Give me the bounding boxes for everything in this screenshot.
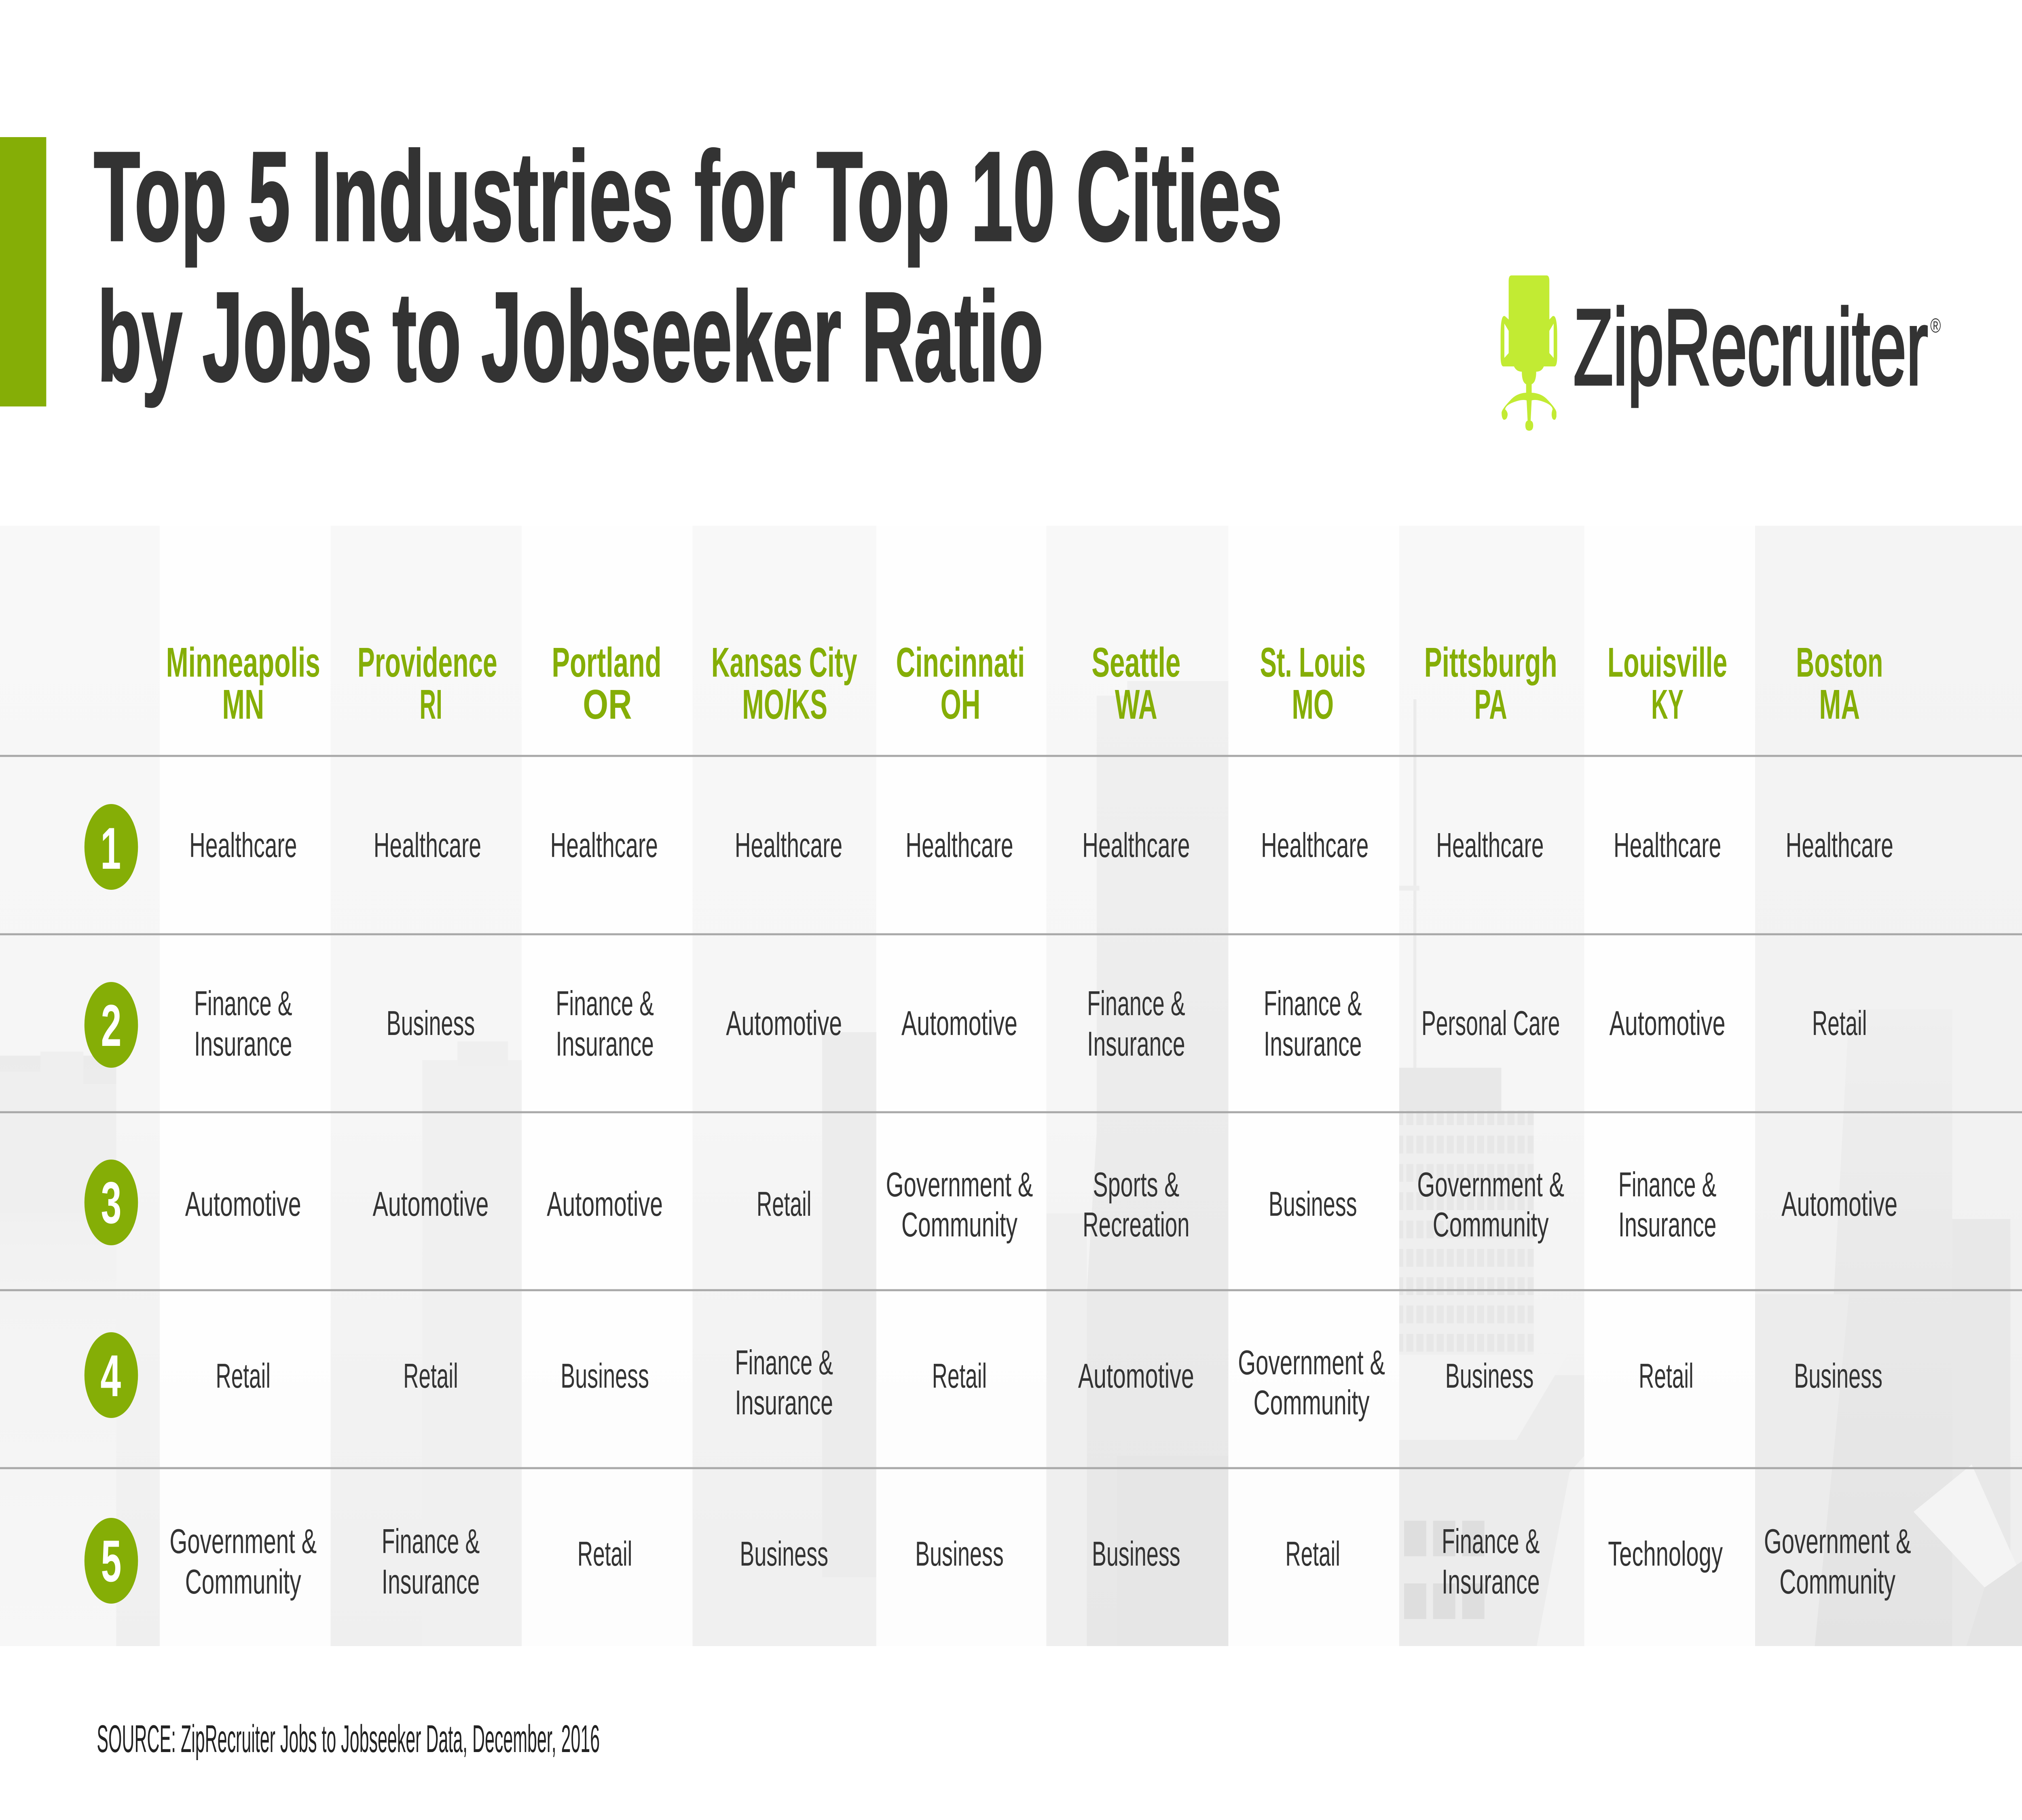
title: by Jobs to Jobseeker Ratio xyxy=(97,266,1043,408)
badge 5 xyxy=(85,1518,138,1604)
rank 4: Finance & xyxy=(735,1344,833,1382)
rank 2: Finance & xyxy=(556,984,654,1023)
rank 3: Insurance xyxy=(1618,1206,1716,1244)
heading: Cincinnati OH: Cincinnati xyxy=(896,639,1025,686)
rank 3 xyxy=(1417,1166,1564,1244)
rank 2: Personal Care xyxy=(1421,1004,1560,1043)
rank 1: Healthcare xyxy=(905,826,1013,865)
heading: Minneapolis MN: Minneapolis xyxy=(166,639,320,686)
rank 4: Business xyxy=(560,1357,649,1395)
rank 2: Insurance xyxy=(1264,1025,1362,1063)
rank 5 xyxy=(169,1522,317,1601)
heading: St. Louis MO: MO xyxy=(1292,681,1334,728)
badge 4: 4 xyxy=(100,1343,121,1409)
column: Pittsburgh xyxy=(1417,639,1564,1601)
badge 3 xyxy=(85,1160,138,1245)
badge 3: 3 xyxy=(101,1170,121,1236)
logo: ZipRecruiter xyxy=(1501,275,1941,431)
rank 5: Technology xyxy=(1608,1535,1723,1573)
rank 2: Finance & xyxy=(194,984,292,1023)
registered mark: ® xyxy=(1930,314,1941,337)
rank 3 xyxy=(1618,1166,1716,1244)
badge 1: 1 xyxy=(100,815,121,881)
rank 3: Community xyxy=(901,1206,1017,1244)
heading: Boston MA xyxy=(1796,639,1883,728)
heading: Louisville KY: Louisville xyxy=(1607,639,1727,686)
rank 3: Business xyxy=(1269,1185,1357,1223)
rank 4 xyxy=(1238,1344,1385,1422)
heading: Portland OR xyxy=(552,639,662,728)
rank 3: Finance & xyxy=(1618,1166,1716,1204)
heading: Louisville KY: KY xyxy=(1651,681,1684,728)
heading: Seattle WA: WA xyxy=(1115,681,1157,728)
heading: St. Louis MO: St. Louis xyxy=(1260,639,1366,686)
rank badges xyxy=(85,804,138,1604)
rank 3 xyxy=(886,1166,1033,1244)
rank 5: Business xyxy=(1092,1535,1180,1573)
heading: Providence RI: RI xyxy=(420,681,442,728)
heading: Providence RI: Providence xyxy=(357,639,497,686)
rank 3: Community xyxy=(1433,1206,1549,1244)
rank 5: Retail xyxy=(1285,1535,1340,1573)
heading: Cincinnati OH: OH xyxy=(941,681,980,728)
column: Kansas City xyxy=(711,639,857,1573)
rank 4: Insurance xyxy=(735,1384,833,1422)
rank 3: Automotive xyxy=(373,1185,489,1223)
rank 2: Automotive xyxy=(1610,1004,1726,1043)
rank 2 xyxy=(1087,984,1185,1063)
rank 2: Retail xyxy=(1812,1004,1867,1043)
rank 5 xyxy=(1442,1522,1540,1601)
rank 4: Government & xyxy=(1238,1344,1385,1382)
rank 1: Healthcare xyxy=(550,826,658,865)
rank 3: Retail xyxy=(757,1185,812,1223)
rank 2 xyxy=(1264,984,1362,1063)
title xyxy=(94,126,1282,408)
rank 4: Retail xyxy=(216,1357,271,1395)
rank 3: Automotive xyxy=(185,1185,301,1223)
rank 3: Recreation xyxy=(1083,1206,1190,1244)
badge 5: 5 xyxy=(101,1528,121,1594)
rank 5: Community xyxy=(1779,1563,1896,1601)
heading: Kansas City MO/KS: Kansas City xyxy=(711,639,857,686)
heading: Kansas City MO/KS xyxy=(711,639,857,728)
rank 5: Community xyxy=(185,1563,301,1601)
table grid lines xyxy=(0,756,2022,1468)
rank 3: Automotive xyxy=(547,1185,663,1223)
heading: Cincinnati OH xyxy=(896,639,1025,728)
rank 2: Automotive xyxy=(901,1004,1017,1043)
rank 1: Healthcare xyxy=(1786,826,1893,865)
rank 5 xyxy=(1764,1522,1911,1601)
rank 5: Insurance xyxy=(1442,1563,1540,1601)
rank 1: Healthcare xyxy=(1082,826,1190,865)
rank 5: Government & xyxy=(1764,1522,1911,1561)
heading: Boston MA: Boston xyxy=(1796,639,1883,686)
rank 1: Healthcare xyxy=(1261,826,1368,865)
rank 1: Healthcare xyxy=(1614,826,1721,865)
heading: Pittsburgh PA: PA xyxy=(1474,681,1507,728)
rank 2: Finance & xyxy=(1087,984,1185,1023)
rank 4: Business xyxy=(1794,1357,1882,1395)
rank 3: Government & xyxy=(1417,1166,1564,1204)
column: Portland xyxy=(547,639,663,1573)
badge 1 xyxy=(85,804,138,890)
column: Providence xyxy=(357,639,497,1601)
rank 4: Business xyxy=(1445,1357,1534,1395)
rank 5: Government & xyxy=(169,1522,317,1561)
rank 2 xyxy=(556,984,654,1063)
rank 1: Healthcare xyxy=(189,826,297,865)
heading: Providence RI xyxy=(357,639,497,728)
heading: Minneapolis MN xyxy=(166,639,320,728)
title: Top 5 Industries for Top 10 Cities xyxy=(94,126,1282,268)
rank 2: Finance & xyxy=(1264,984,1362,1023)
column: Boston xyxy=(1764,639,1911,1601)
rank 2: Business xyxy=(387,1004,475,1043)
rank 2: Insurance xyxy=(556,1025,654,1063)
badge 2: 2 xyxy=(101,993,121,1058)
wordmark: ZipRecruiter xyxy=(1574,287,1928,408)
accent bar xyxy=(0,137,46,406)
column: Seattle xyxy=(1078,639,1194,1573)
rank 1: Healthcare xyxy=(1436,826,1544,865)
rank 3: Automotive xyxy=(1781,1185,1897,1223)
rank 4: Retail xyxy=(403,1357,458,1395)
badge 2 xyxy=(85,982,138,1068)
heading: Louisville KY xyxy=(1607,639,1727,728)
heading: Seattle WA: Seattle xyxy=(1091,639,1180,686)
rank 3: Sports & xyxy=(1093,1166,1179,1204)
rank 4: Retail xyxy=(932,1357,987,1395)
column: St. Louis xyxy=(1238,639,1385,1573)
column: Cincinnati xyxy=(886,639,1033,1573)
heading: Minneapolis MN: MN xyxy=(222,681,264,728)
rank 3 xyxy=(1083,1166,1190,1244)
column: Minneapolis xyxy=(166,639,320,1601)
rank 2: Insurance xyxy=(194,1025,292,1063)
rank 2: Insurance xyxy=(1087,1025,1185,1063)
heading: Pittsburgh PA: Pittsburgh xyxy=(1424,639,1557,686)
rank 4: Automotive xyxy=(1078,1357,1194,1395)
heading: Pittsburgh PA xyxy=(1424,639,1557,728)
rank 1: Healthcare xyxy=(374,826,481,865)
rank 5: Insurance xyxy=(382,1563,480,1601)
source note: SOURCE: ZipRecruiter Jobs to Jobseeker Data, December, 2016 xyxy=(97,1717,600,1760)
heading: Portland OR: OR xyxy=(583,681,632,728)
rank 5: Finance & xyxy=(382,1522,480,1561)
rank 5: Business xyxy=(740,1535,828,1573)
heading: Boston MA: MA xyxy=(1819,681,1860,728)
heading: Portland OR: Portland xyxy=(552,639,662,686)
rank 4: Retail xyxy=(1639,1357,1694,1395)
rank 4 xyxy=(735,1344,833,1422)
column: Louisville xyxy=(1607,639,1727,1573)
panel: skyline background xyxy=(0,526,2022,1646)
heading: St. Louis MO xyxy=(1260,639,1366,728)
badge 4 xyxy=(85,1332,138,1418)
heading: Kansas City MO/KS: MO/KS xyxy=(742,681,827,728)
rank 5: Finance & xyxy=(1442,1522,1540,1561)
heading: Seattle WA xyxy=(1091,639,1180,728)
icon: office chair xyxy=(1501,275,1557,431)
rank 2 xyxy=(194,984,292,1063)
rank 2: Automotive xyxy=(726,1004,842,1043)
rank 5: Retail xyxy=(577,1535,632,1573)
rank 5 xyxy=(382,1522,480,1601)
rank 4: Community xyxy=(1254,1384,1370,1422)
rank 5: Business xyxy=(915,1535,1004,1573)
rank 3: Government & xyxy=(886,1166,1033,1204)
rank 1: Healthcare xyxy=(735,826,842,865)
